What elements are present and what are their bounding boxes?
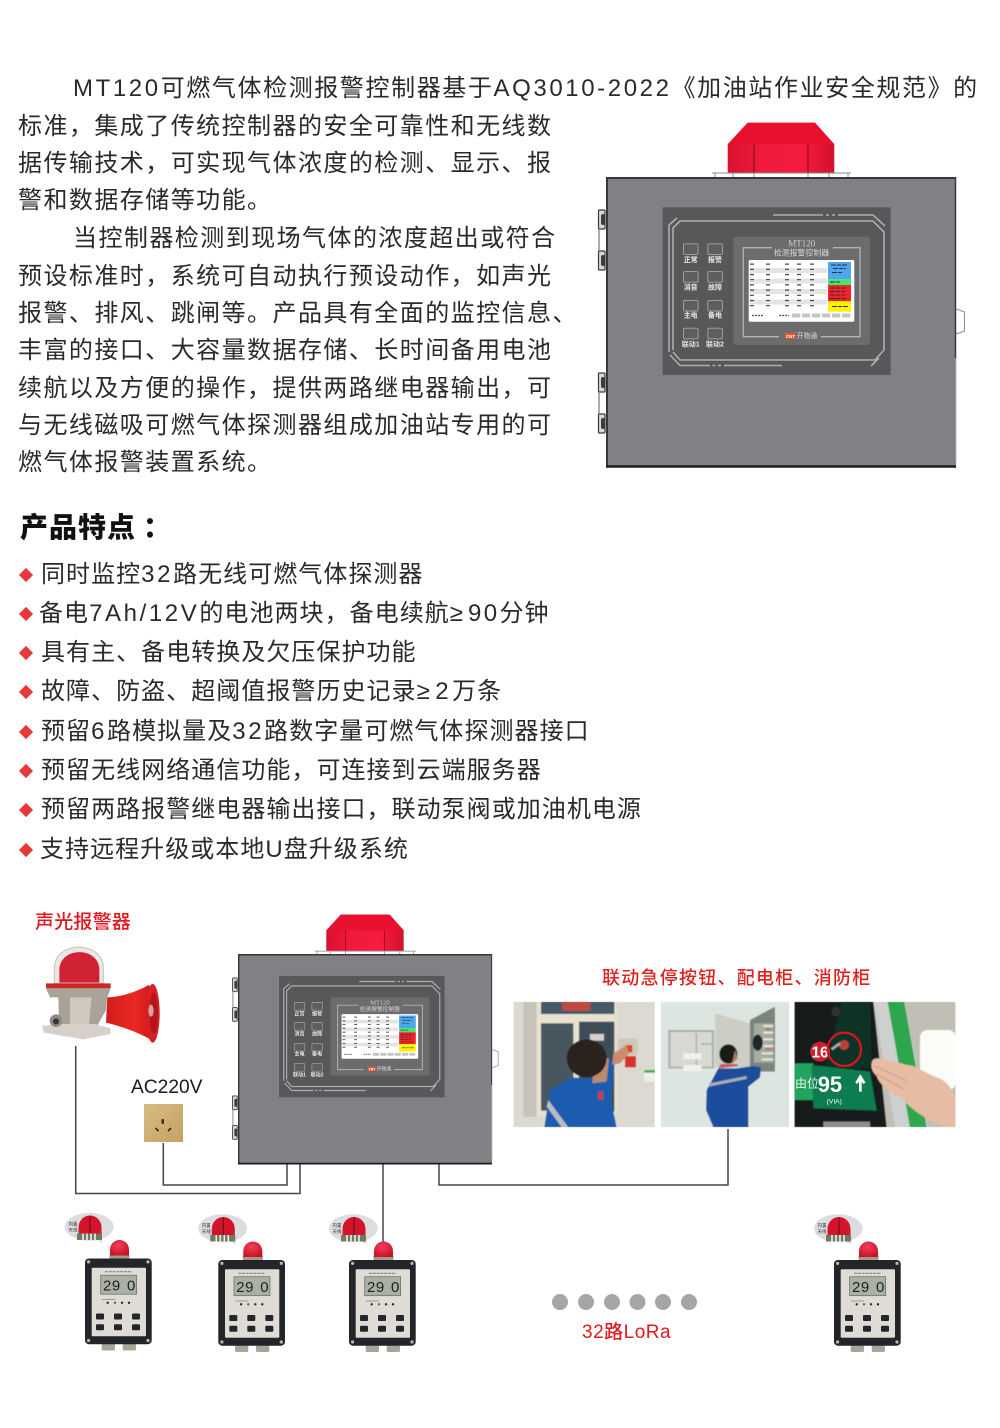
panel text labels: 正常: [684, 255, 698, 264]
panel text labels: 正常: [294, 1011, 305, 1018]
feature list: 故障、防盗、超阈值报警历史记录≥2万条: [41, 678, 502, 705]
panel text labels: 备电: [312, 1051, 322, 1058]
detector 2: [198, 1214, 285, 1352]
panel text labels: 消音: [294, 1030, 305, 1037]
detector 3: 29: [367, 1279, 385, 1296]
intro text block: MT120可燃气体检测报警控制器基于AQ3010-2022《加油站作业安全规范》的: [73, 75, 979, 102]
icon: sound and light alarm: [42, 946, 160, 1043]
panel text labels: CNT: [369, 1067, 375, 1071]
intro text block: 与无线磁吸可燃气体探测器组成加油站专用的可: [18, 412, 552, 439]
controller product image: [598, 123, 964, 467]
feature list: 预留6路模拟量及32路数字量可燃气体探测器接口: [41, 718, 590, 745]
detector 2: 0: [260, 1279, 269, 1296]
detector 3: [329, 1214, 416, 1352]
detector 4: 0: [876, 1279, 884, 1296]
panel text labels: MT120: [370, 999, 391, 1006]
panel text labels: 检测报警控制器: [360, 1005, 400, 1013]
detector 1: [65, 1213, 152, 1350]
panel text labels: MT120: [788, 238, 816, 248]
panel text labels: [293, 999, 400, 1079]
photo: fuel dispenser emergency button: 95: [818, 1072, 842, 1097]
detector 3: 天线: [332, 1228, 342, 1235]
detector 4: 天线: [818, 1228, 827, 1235]
panel text labels: 故障: [312, 1030, 322, 1037]
detector 3: 0: [391, 1279, 399, 1296]
panel text labels: CNT: [786, 334, 795, 339]
feature list: 具有主、备电转换及欠压保护功能: [41, 639, 417, 666]
intro text block: 燃气体报警装置系统。: [18, 449, 272, 476]
detector 4: 29: [852, 1279, 870, 1296]
controller in system diagram: [233, 915, 498, 1164]
photo: fuel dispenser emergency button: 由位: [795, 1075, 819, 1090]
detector 1: 天线: [68, 1226, 78, 1234]
photo: fuel dispenser emergency button: 16: [812, 1044, 829, 1061]
panel text labels: 报警: [312, 1011, 322, 1018]
panel text labels: 联动2: [311, 1072, 324, 1079]
label: 32 channel LoRa: 32路LoRa: [582, 1321, 671, 1343]
intro text block: 标准，集成了传统控制器的安全可靠性和无线数: [18, 113, 552, 140]
photo: emergency stop button: [514, 1002, 655, 1128]
panel text labels: 联动2: [706, 340, 724, 348]
feature list: [19, 561, 642, 863]
heading: product features: 产品特点：: [20, 512, 172, 543]
icon: wall socket: [144, 1104, 183, 1142]
ellipsis dots: [552, 1294, 697, 1310]
panel text labels: 联动1: [682, 340, 700, 348]
detector 4: [814, 1214, 901, 1352]
panel text labels: 主电: [294, 1051, 305, 1058]
intro text block: 警和数据存储等功能。: [18, 187, 272, 214]
intro text block: 据传输技术，可实现气体浓度的检测、显示、报: [18, 150, 552, 177]
detector 4: 内置: [818, 1222, 827, 1229]
intro text block: 当控制器检测到现场气体的浓度超出或符合: [73, 225, 557, 252]
feature list: 备电7Ah/12V的电池两块，备电续航≥90分钟: [39, 600, 550, 627]
panel text labels: 备电: [708, 310, 722, 320]
feature list: 预留无线网络通信功能，可连接到云端服务器: [41, 757, 542, 784]
detector 2: 29: [236, 1279, 254, 1296]
feature list: 预留两路报警继电器输出接口，联动泵阀或加油机电源: [41, 796, 642, 823]
panel text labels: 故障: [708, 282, 722, 292]
detector 1: 0: [127, 1278, 135, 1294]
photo: fuel dispenser emergency button: (VIA): [827, 1098, 842, 1105]
intro text block: 丰富的接口、大容量数据存储、长时间备用电池: [18, 337, 552, 364]
detector 1: 29: [103, 1278, 121, 1294]
intro text block: 续航以及方便的操作，提供两路继电器输出，可: [18, 375, 552, 402]
panel text labels: 主电: [684, 310, 698, 320]
panel text labels: 开物通: [797, 331, 817, 340]
panel text labels: 联动1: [293, 1072, 306, 1079]
label: sound and light alarm: 声光报警器: [35, 911, 131, 933]
label: AC220V: AC220V: [131, 1077, 203, 1098]
panel text labels: 检测报警控制器: [774, 248, 829, 258]
detector 2: 天线: [202, 1228, 211, 1235]
detector 2: 内置: [202, 1222, 211, 1229]
detector 3: 内置: [332, 1222, 342, 1229]
feature list: 支持远程升级或本地U盘升级系统: [40, 836, 409, 863]
panel text labels: 开物通: [376, 1066, 391, 1073]
photo: fuel dispenser emergency button: [794, 1002, 956, 1128]
photo: distribution cabinet: [660, 1002, 790, 1128]
intro text block: 报警、排风、跳闸等。产品具有全面的监控信息、: [18, 300, 578, 327]
panel text labels: 消音: [684, 282, 698, 292]
feature list: 同时监控32路无线可燃气体探测器: [41, 561, 423, 588]
detector 1: 内置: [68, 1220, 78, 1228]
wiring lines: [76, 1046, 728, 1243]
label: linked devices: 联动急停按钮、配电柜、消防柜: [602, 968, 872, 988]
intro text block: [18, 75, 979, 476]
intro text block: 预设标准时，系统可自动执行预设动作，如声光: [18, 263, 552, 290]
panel text labels: 报警: [708, 255, 722, 264]
panel text labels: [682, 238, 829, 348]
